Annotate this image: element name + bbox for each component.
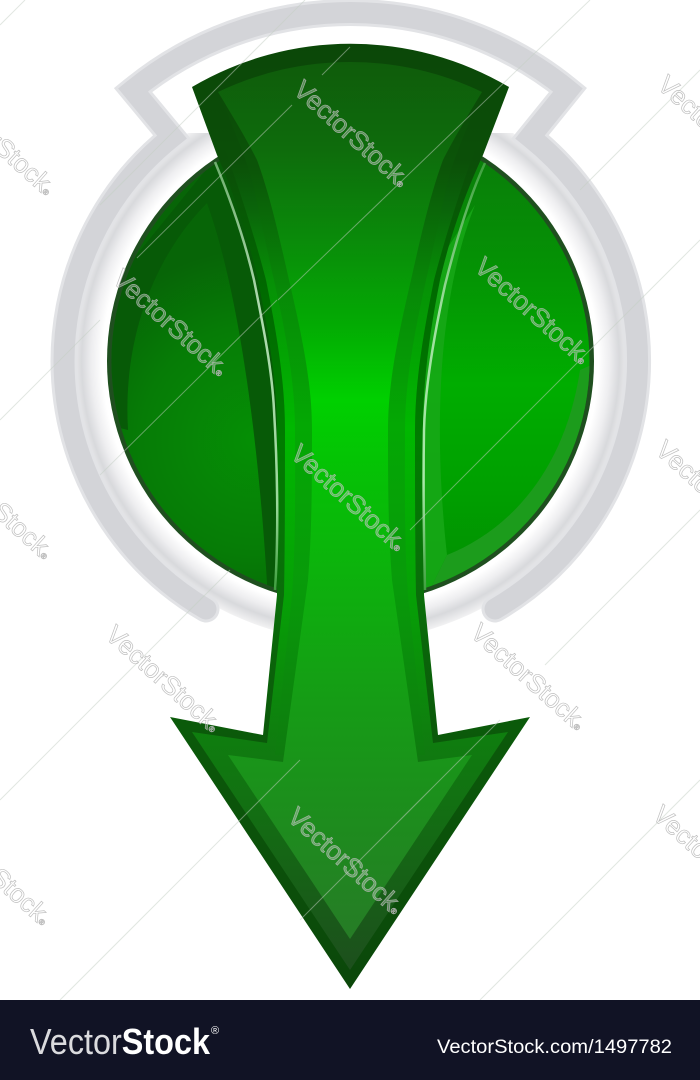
watermark 7: VectorStock: [282, 801, 405, 916]
circle: right light band beside arrow: [423, 206, 474, 588]
icon: green circle: [107, 156, 594, 594]
circle: right lower light band: [432, 366, 590, 586]
watermark 5: ®: [206, 724, 217, 735]
shadow halo around circle: [78, 133, 624, 630]
circle: left fill: [112, 173, 272, 587]
watermark 6: ®: [571, 722, 582, 733]
watermark 4: ®: [391, 543, 402, 554]
watermark 6: VectorStock: [465, 617, 588, 732]
circle: right fill: [424, 160, 590, 588]
arrow: mid band: [192, 150, 508, 970]
watermark 2: ®: [213, 368, 224, 379]
arrow: stripe band: [218, 92, 482, 755]
watermark 10: ®: [36, 917, 47, 928]
footer bar: [0, 1000, 700, 1080]
ring: inner grey band: [64, 13, 638, 609]
footer: registered mark: ®: [211, 1025, 219, 1037]
circle: left dark crescent and stripe: [112, 162, 277, 588]
watermark 4: VectorStock: [285, 438, 408, 553]
footer: image id: VectorStock.com/1497782: [437, 1037, 672, 1058]
icon: grey outer ring: [64, 13, 638, 609]
footer: VectorStock logo: VectorStock: [30, 1021, 211, 1062]
circle: white outline: [102, 113, 598, 609]
watermark 8: ®: [40, 187, 51, 198]
watermark 9: ®: [38, 551, 49, 562]
watermark 2: VectorStock: [107, 263, 230, 378]
watermark 5: VectorStock: [100, 619, 223, 734]
arrow: main downward arrow: [170, 44, 530, 989]
circle: left glossy highlight: [215, 162, 277, 590]
watermark 3: ®: [575, 356, 586, 367]
watermark 1: VectorStock: [288, 74, 411, 189]
watermark 7: ®: [388, 906, 399, 917]
circle: dark rim: [107, 118, 594, 604]
circle: right glossy highlight: [424, 163, 485, 590]
arrow: dark outer silhouette: [170, 44, 530, 989]
arrow: inner gradient face: [218, 62, 482, 939]
watermark 3: VectorStock: [469, 251, 592, 366]
watermark: VectorStock text repeats: [0, 69, 700, 931]
watermark 1: ®: [394, 179, 405, 190]
ring: outer light edge: [64, 13, 638, 609]
